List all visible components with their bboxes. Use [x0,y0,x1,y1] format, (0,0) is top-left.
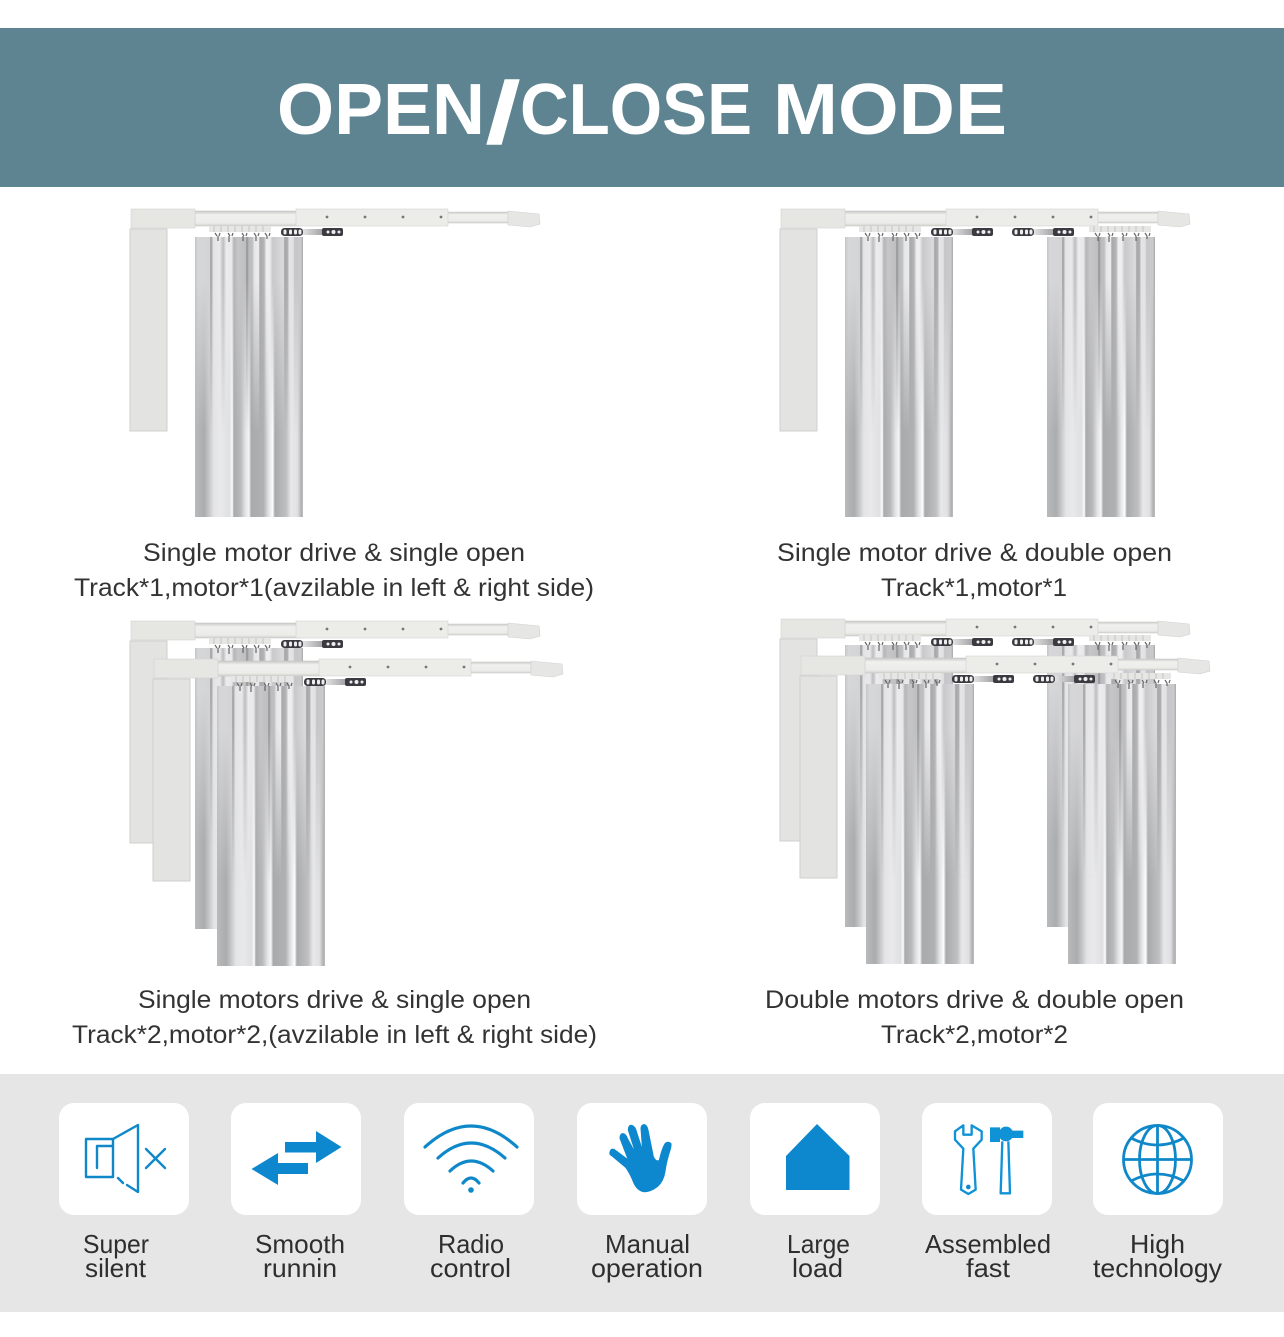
back curtain [195,648,303,929]
right bracket [1012,228,1074,236]
caption line 1: Double motors drive & double open [765,986,1184,1014]
back bracket [281,640,343,648]
icon: two arrows [252,1131,342,1185]
label line 2: technology [1093,1253,1222,1283]
left bracket [931,228,993,236]
back track and motor [130,621,540,843]
icon: house [786,1124,850,1190]
caption line 1: Single motor drive & single open [143,539,525,567]
bracket [281,228,343,236]
label: Large [787,1229,850,1259]
title: MODE [773,70,1007,150]
caption line 2: Track*2,motor*2 [881,1021,1068,1049]
panel: feature strip [0,1074,1284,1312]
feature: smooth running [231,1103,361,1283]
back left curtain [845,645,953,927]
feature: radio control [404,1103,534,1283]
caption line 2: Track*1,motor*1 [881,574,1067,602]
front track and motor [153,659,563,881]
icon: globe [1124,1126,1192,1194]
front left gliders [879,673,941,689]
panel: two motors double open [765,619,1210,1049]
feature: high technology [1093,1103,1223,1283]
back right curtain [1047,645,1155,927]
caption line 2: Track*1,motor*1(avzilable in left & right side) [74,574,594,602]
label: High [1130,1229,1185,1259]
label: Manual [605,1229,690,1259]
label line 2: control [430,1253,511,1283]
back track and motor [780,619,1190,841]
label: Assembled [925,1229,1051,1259]
front right gliders [1109,673,1171,689]
icon: wifi [425,1126,517,1193]
panel: single motor double open [777,209,1190,602]
banner: header [0,28,1284,187]
right gliders [1089,226,1151,242]
label line 2: silent [85,1253,147,1283]
front left curtain [866,684,974,964]
label: Radio [438,1229,504,1259]
title: CLOSE [520,70,752,150]
label line 2: fast [966,1253,1011,1283]
feature: assembled fast [922,1103,1052,1283]
front track and motor [800,656,1210,878]
caption line 1: Single motors drive & single open [138,986,531,1014]
title: / [485,63,521,162]
title [277,63,1007,162]
back left gliders [859,635,921,651]
front curtain [217,686,325,966]
gliders [209,226,271,242]
label line 2: runnin [263,1253,337,1283]
track and motor [780,209,1190,431]
left curtain [845,237,953,517]
front gliders [231,676,293,692]
panel: single motor single open [74,209,594,602]
feature: large load [750,1103,880,1283]
front left bracket [952,675,1014,683]
label line 2: operation [591,1253,703,1283]
left gliders [859,226,921,242]
front right bracket [1033,675,1095,683]
caption line 1: Single motor drive & double open [777,539,1172,567]
icon: wrench and hammer [955,1125,1023,1194]
icon: hand [610,1125,671,1192]
label: Super [83,1229,149,1259]
front right curtain [1068,684,1176,964]
feature: super silent [59,1103,189,1283]
panel: two motors single open [72,621,597,1049]
icon: muted speaker [86,1125,165,1192]
back right gliders [1089,635,1151,651]
title: OPEN [277,70,485,150]
back left bracket [931,638,993,646]
label: Smooth [255,1229,345,1259]
curtain [195,237,303,517]
track and motor [130,209,540,431]
back right bracket [1012,638,1074,646]
front bracket [304,678,366,686]
feature: manual operation [577,1103,707,1283]
caption line 2: Track*2,motor*2,(avzilable in left & right side) [72,1021,597,1049]
back gliders [209,638,271,654]
label line 2: load [792,1253,843,1283]
right curtain [1047,237,1155,517]
